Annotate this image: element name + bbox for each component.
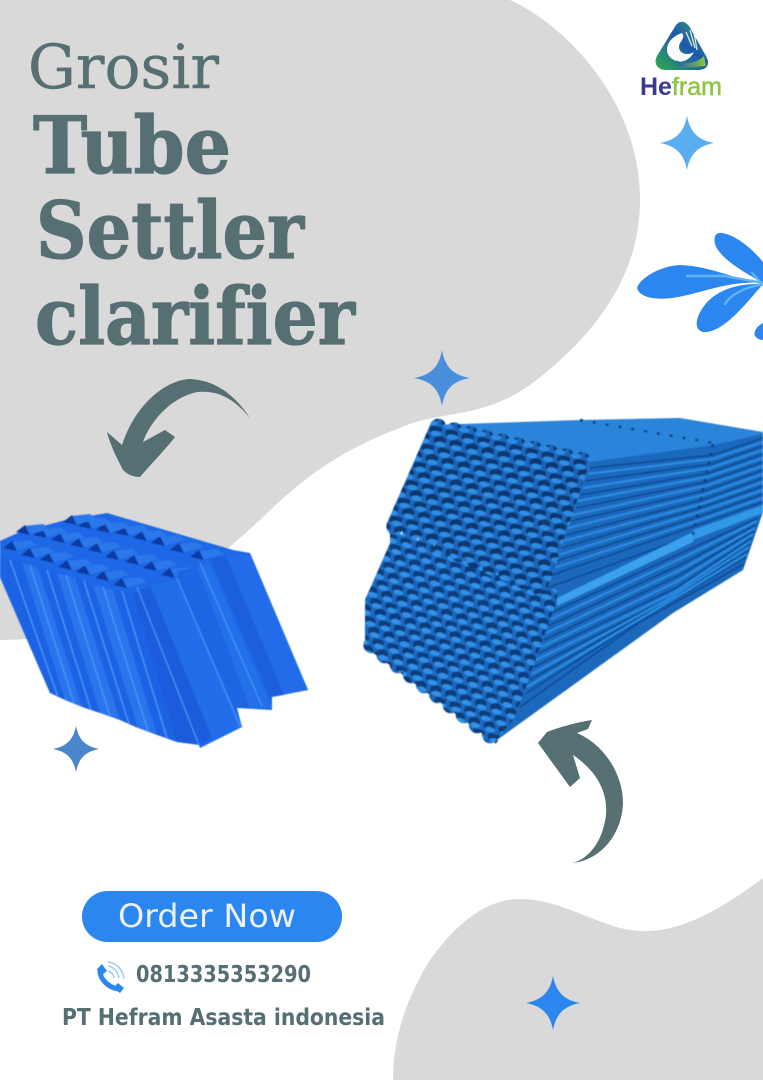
block front strips bbox=[0, 557, 177, 742]
stack side panels bbox=[497, 420, 763, 740]
background blob: top left bbox=[0, 0, 640, 640]
block large panels bbox=[133, 553, 308, 745]
icon: sparkle left bbox=[53, 726, 99, 772]
logo: Hefram bbox=[640, 22, 722, 101]
logo wordmark: Hefram bbox=[640, 73, 722, 101]
product photo: large tube settler stack bbox=[363, 418, 763, 743]
logo mark bbox=[656, 22, 708, 70]
icon: sparkle top right bbox=[660, 116, 714, 170]
stack shadow edge bbox=[370, 648, 497, 742]
product photo: small tube settler block bbox=[0, 513, 308, 748]
title bbox=[28, 32, 356, 363]
title line: Settler: Settler bbox=[36, 184, 305, 277]
stack lower honeycomb face bbox=[363, 530, 557, 743]
arrow: pointing to left product bbox=[107, 379, 250, 477]
title line: Grosir: Grosir bbox=[28, 32, 220, 103]
contact phone bbox=[97, 962, 311, 993]
company name: PT Hefram Asasta indonesia bbox=[62, 1005, 385, 1031]
icon: phone bbox=[97, 962, 124, 993]
stack top surface bbox=[430, 418, 763, 468]
icon: sparkle bottom bbox=[526, 976, 580, 1030]
icon: blue leaves bbox=[637, 233, 763, 340]
title line: clarifier: clarifier bbox=[35, 270, 356, 363]
icon: sparkle centre bbox=[414, 350, 470, 406]
stack upper honeycomb face bbox=[386, 419, 590, 595]
title line: Tube: Tube bbox=[33, 99, 231, 192]
block silhouette bbox=[0, 513, 308, 748]
arrow: pointing to large stack bbox=[538, 720, 623, 863]
phone number: 0813335353290 bbox=[136, 962, 311, 988]
button: Order Now bbox=[82, 891, 342, 942]
background blob: bottom right bbox=[393, 878, 763, 1080]
block top cells bbox=[3, 514, 224, 588]
button: Order Now: Order Now bbox=[118, 897, 296, 935]
